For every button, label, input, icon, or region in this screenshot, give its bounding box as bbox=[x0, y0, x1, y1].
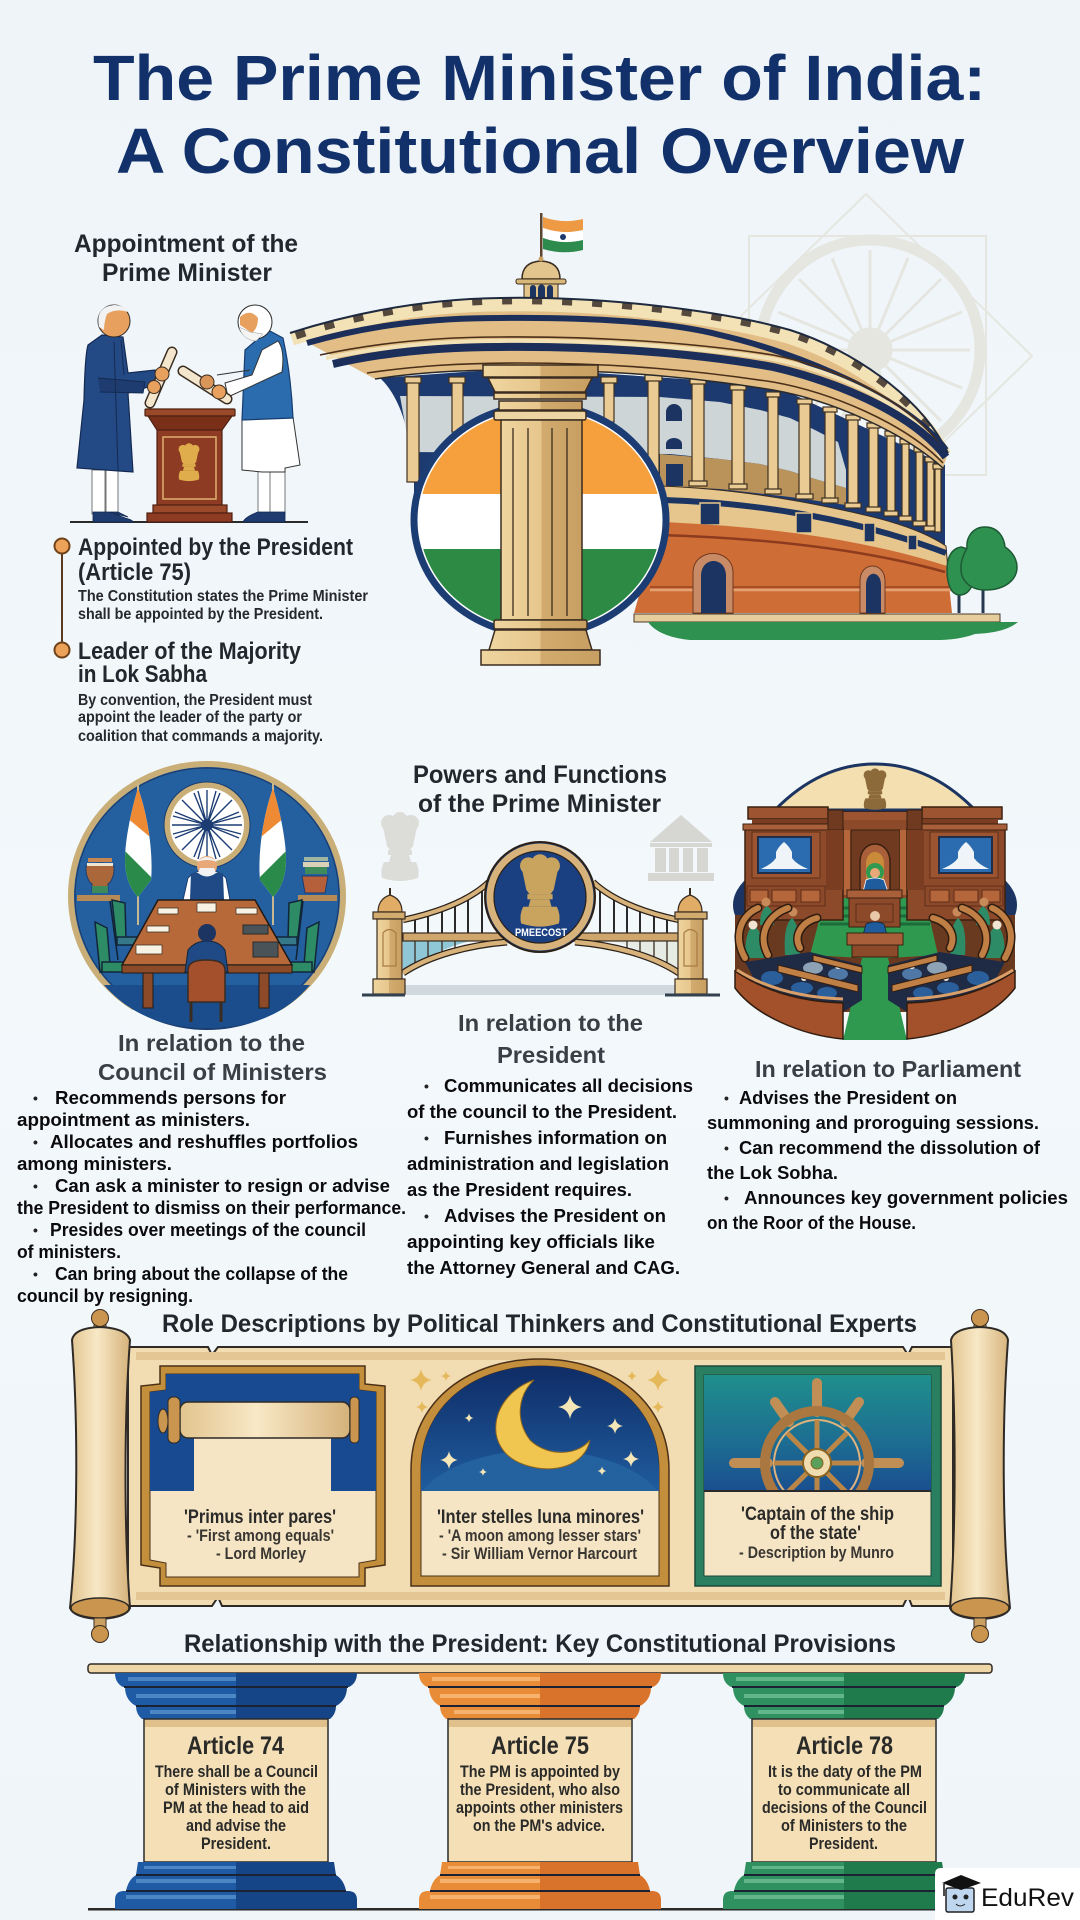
left roller bbox=[70, 1310, 130, 1642]
subheading bbox=[458, 1010, 643, 1068]
heading: relationship with the President: Relationship with the President: Key Constitutional Provisions bbox=[184, 1630, 896, 1658]
arched doors bbox=[693, 554, 885, 613]
column: Article 74: There shall be a Council bbox=[155, 1762, 318, 1781]
left tower bbox=[373, 888, 405, 994]
bullet list: • bbox=[33, 1222, 38, 1238]
lower navy stripe bbox=[333, 347, 946, 457]
panel: parchment scroll bbox=[70, 1310, 1010, 1642]
bullet list: summoning and proroguing sessions. bbox=[707, 1112, 1039, 1133]
card text: - Lord Morley bbox=[216, 1545, 307, 1563]
floor bbox=[104, 985, 310, 1028]
heading: role descriptions: Role Descriptions by Political Thinkers and Constitutional Experts bbox=[162, 1310, 917, 1338]
bullet list: • bbox=[424, 1130, 429, 1146]
card text bbox=[184, 1507, 336, 1563]
card text: 'Inter stelles luna minores' bbox=[437, 1507, 644, 1528]
card text: - 'First among equals' bbox=[187, 1527, 334, 1545]
column: Article 75: Article 75 bbox=[491, 1732, 589, 1760]
urn and books on shelves bbox=[77, 857, 337, 960]
point 2 text: in Lok Sabha bbox=[78, 661, 207, 688]
bullet list: Can ask a minister to resign or advise bbox=[55, 1175, 390, 1196]
illustration: bridge and emblems bbox=[362, 812, 720, 995]
card text bbox=[437, 1507, 644, 1563]
point 2 text bbox=[78, 638, 323, 745]
bullet list: Can recommend the dissolution of bbox=[739, 1137, 1041, 1158]
navy backing bbox=[733, 843, 1017, 967]
card text: 'Captain of the ship bbox=[741, 1504, 894, 1525]
deck bbox=[403, 933, 679, 941]
bullet list: • bbox=[724, 1140, 729, 1156]
bullet list: administration and legislation bbox=[407, 1153, 669, 1174]
bullet list bbox=[707, 1087, 1068, 1233]
subheading bbox=[98, 1030, 327, 1085]
upper navy stripe bbox=[307, 318, 946, 450]
card: Primus inter pares bbox=[141, 1366, 385, 1586]
bullet list: Advises the President on bbox=[444, 1205, 666, 1226]
column: Article 74: and advise the bbox=[186, 1816, 286, 1835]
column: Article 75: on the PM's advice. bbox=[473, 1816, 605, 1835]
scroll held by PM bbox=[183, 371, 227, 399]
section heading: appointment: Appointment of the bbox=[74, 230, 298, 258]
column: in relation to Parliament bbox=[707, 1056, 1068, 1233]
fine moulding lines bbox=[320, 337, 945, 452]
bullet list: of ministers. bbox=[17, 1241, 121, 1262]
bullet list: on the Roor of the House. bbox=[707, 1212, 916, 1233]
central medallion bbox=[485, 842, 595, 952]
timeline: appointment points bbox=[54, 534, 368, 745]
entablature and roof bbox=[290, 298, 948, 468]
icon: graduate book bbox=[942, 1875, 981, 1912]
left side of chamber bbox=[735, 807, 862, 1039]
point 1 text bbox=[78, 534, 368, 623]
bullet list: • bbox=[33, 1266, 38, 1282]
column: in relation to the Council of Ministers bbox=[17, 1030, 406, 1306]
column: Article 78: It is the daty of the PM bbox=[768, 1762, 922, 1781]
bullet list: • bbox=[33, 1134, 38, 1150]
emblem on arc bbox=[864, 768, 886, 810]
column: Article 78: to communicate all bbox=[778, 1780, 910, 1799]
title: A Constitutional Overview bbox=[116, 115, 964, 187]
card text: - 'A moon among lesser stars' bbox=[439, 1527, 641, 1545]
glazed band bbox=[400, 396, 846, 488]
watermark: national emblem bbox=[381, 812, 419, 881]
watermark: temple of law bbox=[648, 815, 714, 881]
icon: crescent moon bbox=[496, 1380, 590, 1469]
card text: - Sir William Vernor Harcourt bbox=[442, 1545, 637, 1563]
card text: - Description by Munro bbox=[739, 1544, 894, 1562]
card: Captain of the ship bbox=[695, 1366, 941, 1586]
ground line bbox=[70, 521, 308, 523]
section heading: powers and functions: Powers and Functions bbox=[413, 761, 667, 789]
crenellated parapet bbox=[292, 305, 945, 455]
illustration: council of ministers roundel bbox=[70, 763, 344, 1029]
dark base bbox=[735, 915, 1015, 1012]
bullet list: appointing key officials like bbox=[407, 1231, 655, 1252]
card text: of the state' bbox=[770, 1523, 861, 1544]
column: Article 78: Article 78 bbox=[796, 1732, 893, 1760]
bullet list: Furnishes information on bbox=[444, 1127, 667, 1148]
card text: 'Primus inter pares' bbox=[184, 1507, 336, 1528]
bullet list: Advises the President on bbox=[739, 1087, 957, 1108]
ground line bbox=[88, 1908, 948, 1910]
stars bbox=[440, 1395, 639, 1476]
panel: constitutional columns bbox=[88, 1664, 992, 1910]
subheading: In relation to the bbox=[118, 1030, 305, 1056]
title: The Prime Minister of India: bbox=[93, 42, 986, 114]
title bbox=[93, 42, 986, 187]
section heading: appointment: Prime Minister bbox=[102, 259, 272, 287]
column: Article 78: President. bbox=[809, 1834, 878, 1853]
bullet list: among ministers. bbox=[17, 1153, 172, 1174]
section heading: appointment bbox=[74, 230, 298, 287]
flag on dome bbox=[540, 213, 583, 263]
upper chords bbox=[403, 882, 679, 920]
chairperson bbox=[183, 855, 230, 900]
dome bbox=[516, 256, 566, 298]
plinth and lawn bbox=[634, 614, 1000, 622]
column: Article 78: of Ministers to the bbox=[781, 1816, 907, 1835]
lower arch infill bbox=[403, 941, 470, 972]
green floor bbox=[810, 898, 938, 1040]
central pillar bbox=[481, 365, 600, 665]
bullet list: • bbox=[424, 1078, 429, 1094]
column: Article 74 bbox=[115, 1673, 357, 1909]
card: Inter stelles luna minores bbox=[410, 1359, 670, 1590]
bullet list: the President to dismiss on their performance. bbox=[17, 1197, 406, 1218]
point 2 text: coalition that commands a majority. bbox=[78, 728, 323, 745]
point 1 text: (Article 75) bbox=[78, 559, 191, 586]
column: Article 75: the President, who also bbox=[460, 1780, 620, 1799]
colonnade backdrop bbox=[380, 368, 945, 545]
right tower bbox=[675, 888, 707, 994]
subheading: President bbox=[497, 1042, 605, 1068]
column: Article 74: President. bbox=[201, 1834, 271, 1853]
tricolour circle bbox=[410, 400, 670, 639]
illustration: Parliament chamber roundel bbox=[733, 764, 1017, 1040]
subheading: In relation to the bbox=[458, 1010, 643, 1036]
column: Article 75: appoints other ministers bbox=[456, 1798, 623, 1817]
watermark: Ashoka chakra bbox=[700, 194, 1032, 518]
subheading: In relation to Parliament bbox=[755, 1056, 1021, 1082]
bullet list: Communicates all decisions bbox=[444, 1075, 693, 1096]
small windows bbox=[666, 404, 683, 486]
bullet list: • bbox=[424, 1208, 429, 1224]
decorative stars around arch bbox=[410, 1369, 669, 1413]
timeline dot 1 bbox=[54, 538, 70, 554]
icon: ship wheel bbox=[729, 1378, 904, 1490]
section heading: powers and functions: of the Prime Minister bbox=[418, 790, 661, 818]
point 2 text: Leader of the Majority bbox=[78, 638, 301, 665]
trees bbox=[947, 527, 1017, 613]
right side of chamber bbox=[888, 807, 1015, 1039]
chakra bbox=[164, 782, 250, 868]
illustration: President handing scroll to PM bbox=[70, 305, 308, 523]
column: in relation to the President bbox=[407, 1010, 693, 1278]
bullet list: the Lok Sobha. bbox=[707, 1162, 838, 1183]
flags bbox=[120, 780, 291, 925]
lower buff wall bbox=[660, 454, 846, 505]
top beam bbox=[88, 1664, 992, 1673]
right roller bbox=[950, 1310, 1010, 1642]
illustration: Parliament building bbox=[290, 213, 1018, 665]
card text bbox=[739, 1504, 894, 1562]
column: Article 74: Article 74 bbox=[187, 1732, 284, 1760]
bullet list: council by resigning. bbox=[17, 1285, 193, 1306]
scroll sheet bbox=[128, 1347, 953, 1606]
bullet list bbox=[407, 1075, 693, 1278]
column: Article 78 bbox=[723, 1673, 965, 1909]
section heading: powers and functions bbox=[413, 761, 667, 818]
bullet list: Announces key government policies bbox=[744, 1187, 1068, 1208]
column: Article 74: of Ministers with the bbox=[165, 1780, 306, 1799]
bullet list: • bbox=[33, 1178, 38, 1194]
bullet list: appointment as ministers. bbox=[17, 1109, 250, 1130]
clerk and desk bbox=[847, 911, 903, 957]
bullet list: Allocates and reshuffles portfolios bbox=[50, 1131, 358, 1152]
point 2 text: appoint the leader of the party or bbox=[78, 709, 302, 726]
lower band with window blocks bbox=[660, 486, 948, 570]
columns bbox=[405, 375, 943, 532]
icon: scroll bbox=[158, 1397, 359, 1491]
bridge structure bbox=[362, 842, 720, 995]
bullet list: Can bring about the collapse of the bbox=[55, 1263, 348, 1284]
bullet list: • bbox=[724, 1090, 729, 1106]
column: Article 75 bbox=[419, 1673, 661, 1909]
figure: President bbox=[77, 305, 172, 522]
podium bbox=[145, 409, 235, 522]
timeline dot 2 bbox=[54, 642, 70, 658]
bullet list: as the President requires. bbox=[407, 1179, 632, 1200]
seated minister and chair bbox=[185, 924, 228, 1022]
green chairs bbox=[95, 900, 319, 972]
bullet list: of the council to the President. bbox=[407, 1101, 677, 1122]
speaker arch and speaker bbox=[847, 844, 902, 927]
figure: Prime Minister bbox=[183, 305, 300, 522]
brick base bbox=[634, 522, 952, 613]
centre wall bbox=[835, 812, 915, 900]
bullet list: Presides over meetings of the council bbox=[50, 1219, 366, 1240]
bullet list: Recommends persons for bbox=[55, 1087, 286, 1108]
central medallion: PMEECOST bbox=[515, 927, 567, 939]
bullet list bbox=[17, 1087, 406, 1306]
bullet list: • bbox=[33, 1090, 38, 1106]
bullet list: the Attorney General and CAG. bbox=[407, 1257, 680, 1278]
column: Article 75: The PM is appointed by bbox=[460, 1762, 620, 1781]
logo: EduRev bbox=[935, 1868, 1080, 1920]
point 2 text: By convention, the President must bbox=[78, 692, 313, 709]
column: Article 78: decisions of the Council bbox=[762, 1798, 927, 1817]
top arc bbox=[775, 764, 975, 810]
table bbox=[122, 900, 292, 1008]
subheading: Council of Ministers bbox=[98, 1059, 327, 1085]
point 1 text: shall be appointed by the President. bbox=[78, 606, 323, 623]
scroll held by President bbox=[148, 352, 172, 403]
point 1 text: The Constitution states the Prime Minister bbox=[78, 588, 368, 605]
bullet list: • bbox=[724, 1190, 729, 1206]
logo: EduRev: EduRev bbox=[981, 1884, 1075, 1912]
point 1 text: Appointed by the President bbox=[78, 534, 353, 561]
hangers bbox=[415, 889, 667, 934]
lower arches bbox=[403, 942, 679, 973]
column: Article 74: PM at the head to aid bbox=[163, 1798, 309, 1817]
